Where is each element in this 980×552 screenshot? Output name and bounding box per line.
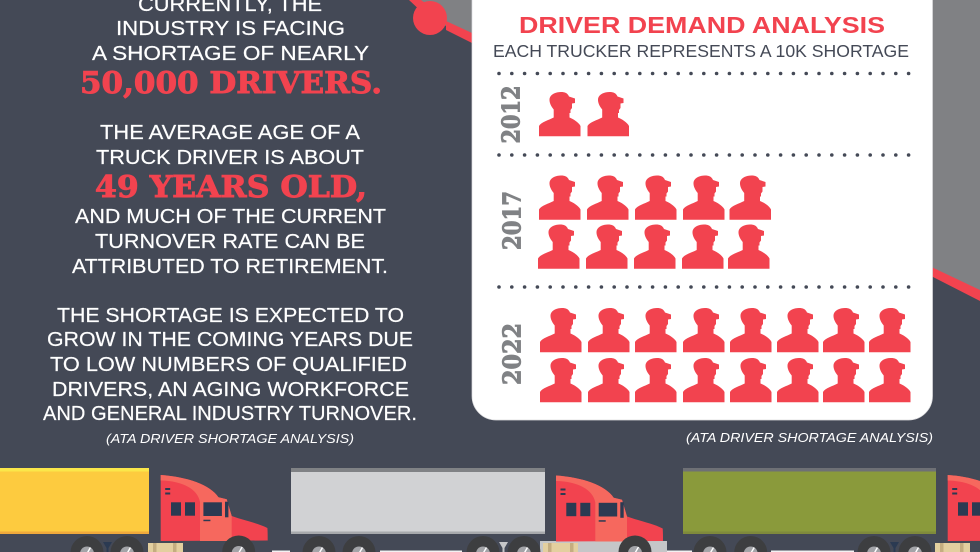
text block: driver age: TRUCK DRIVER IS ABOUT: [96, 147, 364, 169]
text block: shortage outlook: [43, 305, 417, 425]
truck: grey: [291, 468, 667, 552]
year label 2022: 2022: [498, 323, 526, 385]
source caption left: (ATA DRIVER SHORTAGE ANALYSIS): [106, 431, 354, 446]
text block: shortage outlook: TO LOW NUMBERS OF QUALIFIED: [50, 354, 407, 376]
text block: driver age: TURNOVER RATE CAN BE: [95, 231, 365, 253]
text block: driver shortage: [80, 0, 382, 101]
panel title: DRIVER DEMAND ANALYSIS: [519, 12, 885, 38]
panel: driver demand analysis: [472, 0, 932, 420]
cab: [948, 475, 980, 541]
panel subtitle: EACH TRUCKER REPRESENTS A 10K SHORTAGE: [493, 41, 909, 61]
red diagonal line with circle: [409, 0, 980, 301]
year label 2012: 2012: [496, 86, 526, 144]
truck: olive: [683, 468, 980, 552]
source caption right: (ATA DRIVER SHORTAGE ANALYSIS): [686, 430, 933, 445]
year label 2017: 2017: [498, 191, 526, 250]
wheels: [302, 536, 652, 552]
wheels: [70, 536, 255, 552]
text block: driver shortage: INDUSTRY IS FACING: [116, 18, 345, 40]
pictogram rows 2022: [540, 308, 910, 402]
deck: [540, 541, 667, 552]
text block: shortage outlook: THE SHORTAGE IS EXPECTED TO: [57, 305, 404, 327]
text block: driver age: ATTRIBUTED TO RETIREMENT.: [72, 256, 388, 278]
cargo crate: [543, 543, 578, 552]
trailer: [291, 468, 545, 534]
truck: yellow: [0, 468, 268, 552]
text block: driver shortage: 50,000 DRIVERS.: [80, 66, 382, 101]
text block: driver age: THE AVERAGE AGE OF A: [100, 122, 361, 144]
text block: driver shortage: A SHORTAGE OF NEARLY: [92, 43, 369, 65]
cargo crate: [935, 543, 970, 552]
text block: shortage outlook: AND GENERAL INDUSTRY TURNOVER.: [43, 403, 417, 425]
text block: driver age: AND MUCH OF THE CURRENT: [75, 206, 386, 228]
cab: [556, 476, 663, 542]
pictogram row 2012: [539, 92, 629, 136]
trailer: [683, 468, 936, 534]
text block: driver age: 49 YEARS OLD,: [95, 170, 367, 205]
cargo crate: [148, 543, 183, 552]
text block: shortage outlook: GROW IN THE COMING YEARS DUE: [47, 329, 413, 351]
text block: driver age: [72, 122, 388, 278]
trailer: [0, 468, 149, 534]
cab: [161, 475, 268, 541]
road markings: [272, 550, 854, 552]
grey diagonal backdrop: [420, 0, 980, 292]
text block: shortage outlook: DRIVERS, AN AGING WORKFORCE: [52, 379, 409, 401]
wheels: [694, 536, 932, 552]
pictogram rows 2017: [538, 176, 771, 269]
panel background: [472, 0, 932, 420]
